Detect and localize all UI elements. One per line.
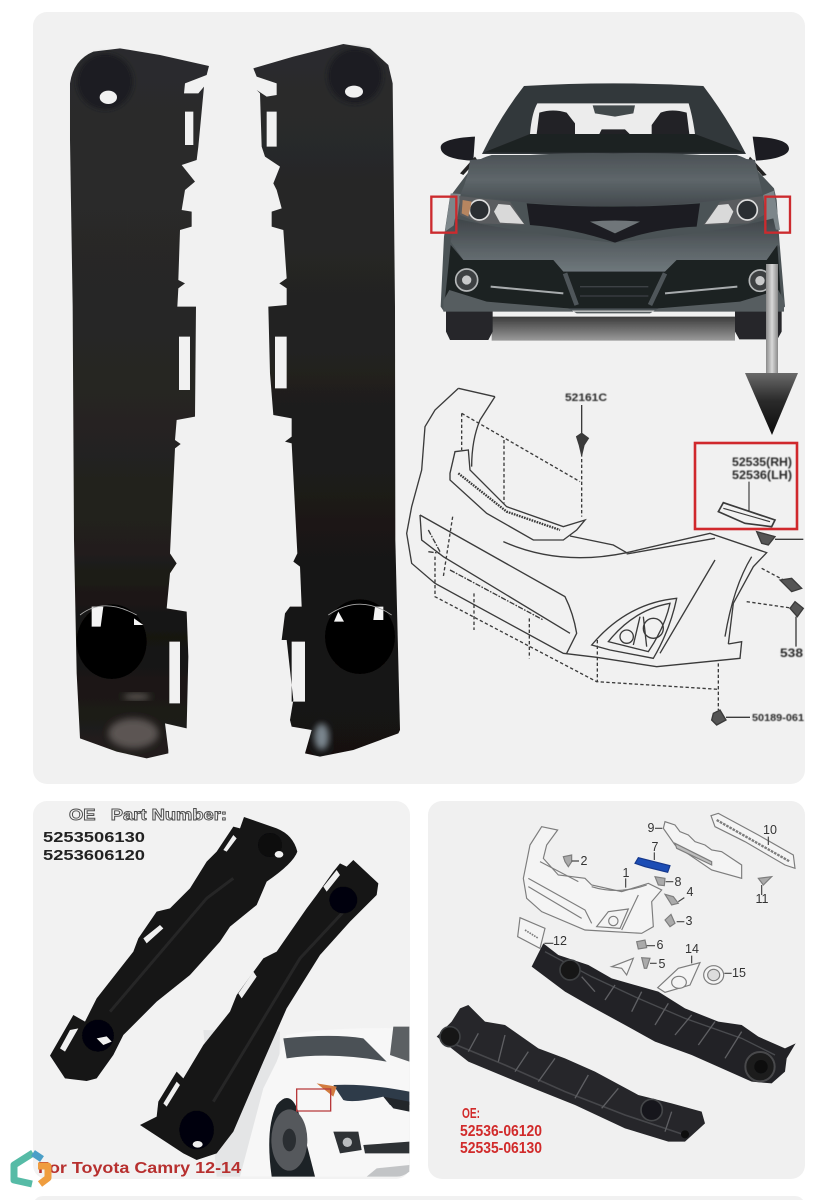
- front bracket view: [437, 1005, 705, 1142]
- bumper outline: [407, 388, 767, 667]
- OE part number list: 52536-06120: [460, 1123, 542, 1140]
- side fenders: [445, 191, 780, 232]
- diagram labels: 50189-061: [752, 713, 804, 724]
- part number callouts: 5: [659, 957, 666, 971]
- left vertical bumper bracket: [70, 48, 209, 758]
- mirrors: [441, 137, 789, 161]
- fitment caption: For Toyota Camry 12-14: [38, 1160, 241, 1177]
- bumper outline: [523, 827, 662, 933]
- bumper parts diagram: [407, 388, 803, 725]
- red marker boxes: [431, 197, 456, 233]
- part number callouts: [553, 821, 777, 980]
- clip 52161C: [577, 405, 588, 455]
- right vertical bumper bracket: [253, 44, 400, 757]
- red callout box on diagram: [695, 443, 797, 529]
- leader lines: [544, 828, 768, 973]
- fasteners: [712, 532, 803, 725]
- diagram labels: 52161C: [565, 392, 607, 404]
- part number callouts: 4: [687, 885, 694, 899]
- OE Part Number heading: OE Part Number:: [69, 807, 227, 824]
- part number callouts: 1: [623, 866, 630, 880]
- grille slot: [450, 450, 585, 540]
- part number callouts: 9: [648, 821, 655, 835]
- lower-right angled bracket: [140, 860, 378, 1160]
- part 9 absorber: [663, 822, 742, 878]
- panel: exploded parts view: [428, 801, 805, 1179]
- OE part number list: [460, 1105, 542, 1157]
- part 7 blue bracket: [635, 858, 670, 872]
- diagram labels: [565, 392, 804, 724]
- panel: OE part numbers with bracket pair: [33, 801, 410, 1179]
- OE part number list: OE:: [462, 1105, 480, 1122]
- fasteners: [563, 855, 772, 968]
- part number callouts: 6: [657, 938, 664, 952]
- upper bumper: [451, 218, 779, 272]
- diagram labels: 52536(LH): [732, 468, 792, 482]
- part numbers: [43, 829, 145, 864]
- upper-left angled bracket: [50, 817, 297, 1081]
- part number callouts: 7: [652, 840, 659, 854]
- ground shadow and wheels: [492, 317, 735, 341]
- icon: app logo: [14, 1153, 48, 1184]
- part numbers: 5253606120: [43, 847, 145, 864]
- part number callouts: 10: [763, 823, 777, 837]
- part number callouts: 3: [686, 914, 693, 928]
- white car photo: [203, 1027, 409, 1177]
- OE part number list: 52535-06130: [460, 1140, 542, 1157]
- arrow: car to diagram: [745, 264, 798, 435]
- part number callouts: 11: [756, 892, 769, 906]
- part number callouts: 8: [675, 875, 682, 889]
- part number callouts: 15: [732, 966, 746, 980]
- fog lamp: [592, 598, 677, 658]
- panel: main product view: [33, 12, 805, 784]
- diagram labels: 52535(RH): [732, 455, 792, 469]
- part number callouts: 14: [685, 942, 699, 956]
- car front photo: [431, 83, 790, 341]
- exploded bumper line art: [518, 813, 795, 992]
- dashed assembly lines: [435, 413, 793, 710]
- grille: [527, 203, 700, 243]
- lower intake: [444, 245, 782, 308]
- headlights: [459, 196, 525, 225]
- part 10 reinforcement: [711, 813, 795, 868]
- part 12 plate: [518, 918, 545, 948]
- trim and bezel pieces: [612, 958, 633, 975]
- diagram labels: 538: [780, 646, 803, 660]
- roof and windshield: [482, 83, 746, 154]
- body silhouette: [441, 155, 785, 311]
- hood: [461, 153, 763, 207]
- rear bracket view: [532, 943, 796, 1083]
- part number callouts: 12: [553, 934, 567, 948]
- part numbers: 5253506130: [43, 829, 145, 846]
- next panel top edge: [33, 1196, 805, 1200]
- part number callouts: 2: [581, 854, 588, 868]
- bracket on diagram: [718, 503, 775, 527]
